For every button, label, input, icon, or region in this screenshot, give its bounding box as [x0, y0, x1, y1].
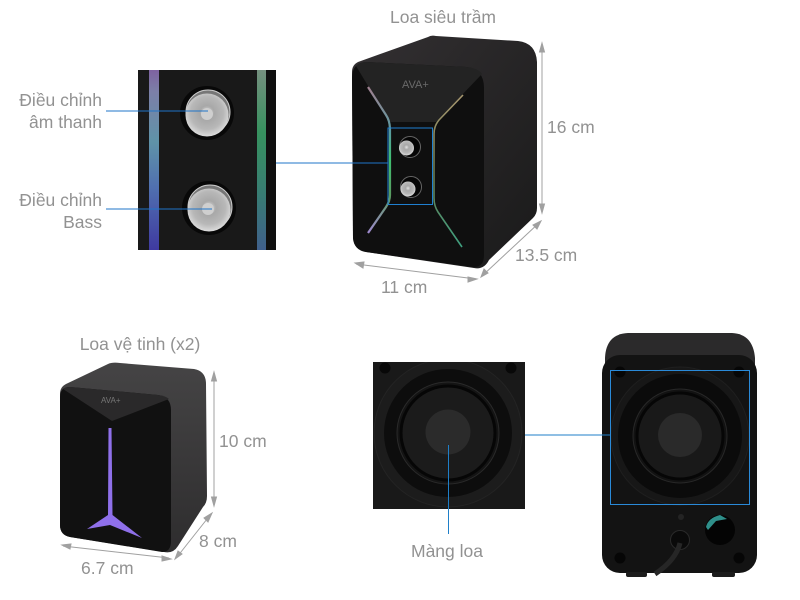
label: volume adjust	[19, 90, 102, 132]
satellite speaker photo	[60, 363, 207, 552]
dimension: 11 cm: 11 cm	[381, 277, 427, 297]
label: driver membrane: Màng loa	[411, 541, 483, 561]
dimension: 8 cm: 8 cm	[199, 531, 237, 551]
label: bass adjust: Điều chỉnh	[19, 190, 102, 210]
dimension: 13.5 cm: 13.5 cm	[515, 245, 577, 265]
dimension: 16 cm: 16 cm	[547, 117, 595, 137]
blue highlight frame on rear speaker	[610, 370, 750, 504]
subwoofer front photo: AVA+	[402, 79, 429, 91]
title: satellite label: Loa vệ tinh (x2)	[80, 334, 200, 354]
dimension: 6.7 cm: 6.7 cm	[81, 558, 134, 578]
knob close-up panel	[138, 70, 276, 250]
dimension: 10 cm: 10 cm	[219, 431, 267, 451]
callout: connector between close-up and rear	[525, 434, 610, 436]
rear speaker photo	[602, 333, 757, 577]
subwoofer front photo	[352, 36, 537, 268]
callout lines: knob panel	[106, 111, 388, 209]
title: subwoofer label: Loa siêu trầm	[390, 7, 496, 27]
satellite speaker photo: AVA+	[101, 396, 121, 405]
label: volume adjust: Điều chỉnh	[19, 90, 102, 110]
driver close-up panel	[373, 359, 525, 509]
blue highlight frame on subwoofer	[388, 128, 432, 204]
dimension arrows: satellite	[62, 372, 216, 561]
label: bass adjust: Bass	[63, 212, 102, 232]
callout: driver label line	[448, 445, 450, 534]
label: bass adjust	[19, 190, 102, 232]
dimension arrows: subwoofer	[355, 43, 544, 282]
label: volume adjust: âm thanh	[29, 112, 102, 132]
